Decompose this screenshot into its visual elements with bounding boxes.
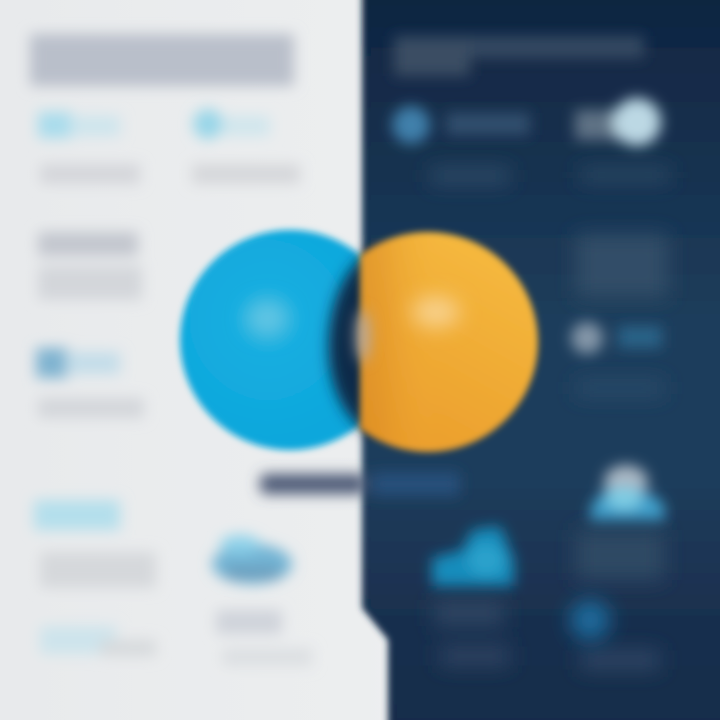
icon: bottom right blue badge xyxy=(570,600,610,640)
chart: circle overlap shadow xyxy=(329,256,372,430)
text block: left top item two xyxy=(192,109,300,184)
label: center pill xyxy=(260,472,460,496)
heading: left title block xyxy=(30,34,294,86)
text block: left top item one xyxy=(38,112,140,184)
text block: left bottom items xyxy=(34,500,312,666)
icon: right cloud xyxy=(590,465,665,520)
icon: lower blue cloud chart xyxy=(432,526,514,586)
text block: left middle item xyxy=(38,232,142,300)
icon: right middle dot with label xyxy=(571,322,662,354)
panel: right dark background xyxy=(362,0,720,720)
icon: center overlap highlight xyxy=(356,310,370,362)
icon: right top glowing cloud xyxy=(575,98,661,146)
icon: right top blue badge xyxy=(392,106,530,144)
heading: right title block xyxy=(394,36,644,76)
icon: circle highlights xyxy=(247,296,460,334)
chart: orange circle xyxy=(318,232,538,452)
text block: right column lines xyxy=(430,168,670,670)
text block: left lower item xyxy=(36,348,144,418)
icon: left small chart xyxy=(212,535,292,584)
chart: blue circle xyxy=(180,230,400,450)
